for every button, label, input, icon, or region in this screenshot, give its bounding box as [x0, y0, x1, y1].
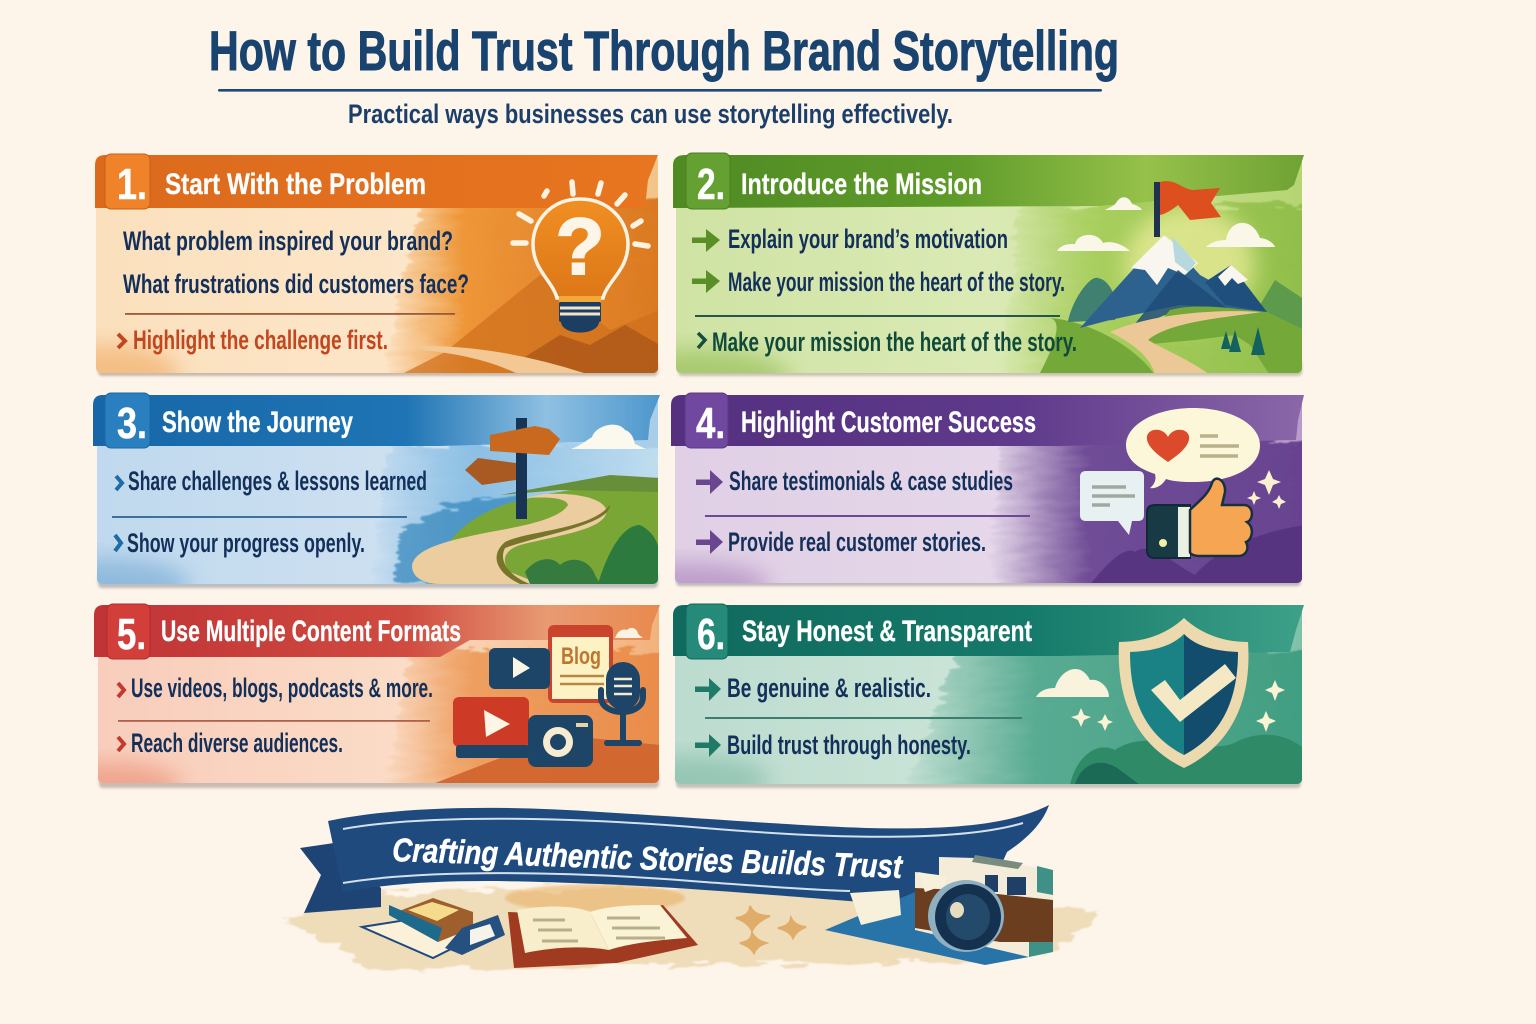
bullet 1: Use videos, blogs, podcasts & more.: [131, 673, 433, 703]
takeaway 2: [698, 327, 1077, 357]
number badge 2: 2.: [697, 160, 725, 209]
number badge 6: [686, 604, 728, 659]
icon: light bulb with question mark: [513, 182, 648, 332]
icon: shield with check mark: [1036, 618, 1285, 768]
title: How to Build Trust Through Brand Storytelling: [209, 19, 1119, 82]
heading 2: Introduce the Mission: [741, 168, 982, 201]
bullet 2: Show your progress openly.: [127, 528, 365, 558]
takeaway 1: Highlight the challenge first.: [133, 325, 388, 355]
card 5 background: [98, 608, 659, 783]
ribbon: [328, 805, 1049, 905]
number badge 2: [686, 153, 730, 209]
card 1 header band: [95, 155, 658, 208]
icon: arrow: [696, 470, 723, 494]
icon: arrow: [692, 229, 720, 252]
card 2 background: [676, 155, 1302, 373]
number badge 5: [107, 604, 150, 659]
subtitle: Practical ways businesses can use storytelling effectively.: [348, 99, 953, 129]
card 5 header band: [94, 605, 660, 657]
sand ground: [285, 887, 1100, 968]
number badge 4: 4.: [696, 399, 725, 448]
icon: arrow: [696, 530, 723, 554]
heading 5: Use Multiple Content Formats: [161, 615, 461, 648]
panel: 3 Show the Journey: [93, 392, 660, 590]
number badge 3: 3.: [117, 399, 147, 448]
bullet 2: Build trust through honesty.: [727, 730, 971, 760]
bullet 2: Provide real customer stories.: [728, 527, 986, 557]
ribbon tail: [300, 843, 381, 913]
bullet 1: Share testimonials & case studies: [729, 466, 1013, 496]
heading 1: Start With the Problem: [165, 168, 426, 201]
panel: 4 Highlight Customer Success: [671, 392, 1304, 588]
icons: media formats: Blog: [561, 643, 601, 670]
bullet 1: [116, 466, 427, 496]
illustration: mountain with flag: [1057, 181, 1305, 375]
number badge 4: [685, 393, 728, 448]
card 1 background: [96, 155, 658, 373]
card 6 header band: [673, 605, 1304, 656]
icon: arrow: [695, 734, 721, 757]
icons: media formats: [453, 625, 643, 767]
icon: arrow: [695, 678, 721, 701]
takeaway 2: Make your mission the heart of the story.: [712, 327, 1077, 357]
number badge 1: [105, 154, 150, 209]
question 2: What frustrations did customers face?: [123, 269, 469, 299]
question 1: What problem inspired your brand?: [123, 226, 453, 256]
heading 4: Highlight Customer Success: [741, 406, 1036, 439]
icon: open book: [508, 905, 698, 968]
number badge 1: 1.: [117, 160, 147, 209]
panel: 1 Start With the Problem: [95, 154, 660, 378]
number badge 6: 6.: [697, 610, 725, 659]
bullet 1: Share challenges & lessons learned: [128, 466, 427, 496]
heading 3: Show the Journey: [162, 406, 353, 439]
bullet 1: Explain your brand’s motivation: [728, 224, 1008, 254]
card 4 background: [675, 395, 1302, 583]
card 6 background: [675, 605, 1302, 784]
banner text: Crafting Authentic Stories Builds Trust: [392, 831, 904, 885]
stars in sand: [736, 906, 806, 953]
icon: books: [362, 898, 505, 958]
number badge 5: 5.: [117, 610, 146, 659]
bullet 1: Be genuine & realistic.: [727, 673, 931, 703]
closing banner scene: [285, 805, 1100, 968]
card 4 header band: [671, 395, 1304, 446]
icon: camera with envelope: [825, 855, 1053, 965]
panel: 5 Use Multiple Content Formats: [94, 604, 660, 790]
number badge 3: [105, 393, 150, 448]
bullet 2: Reach diverse audiences.: [131, 728, 343, 758]
panel: 2 Introduce the Mission: [673, 152, 1304, 378]
bullet 2: [118, 728, 343, 758]
bullet 1: [118, 673, 433, 703]
icon: arrow: [692, 270, 720, 293]
illustration: winding road and signpost: [412, 418, 660, 584]
bullet 2: [115, 528, 365, 558]
card 3 header band: [93, 395, 660, 446]
icon: light bulb with question mark: ?: [556, 202, 604, 291]
card 2 header band: [673, 155, 1304, 208]
panel: 6 Stay Honest & Transparent: [673, 604, 1304, 790]
card 3 background: [97, 400, 658, 584]
takeaway 1: [118, 325, 388, 355]
illustration: speech bubbles and thumbs up: [1080, 408, 1286, 558]
bullet 2: Make your mission the heart of the story.: [728, 267, 1065, 297]
heading 6: Stay Honest & Transparent: [742, 615, 1032, 648]
